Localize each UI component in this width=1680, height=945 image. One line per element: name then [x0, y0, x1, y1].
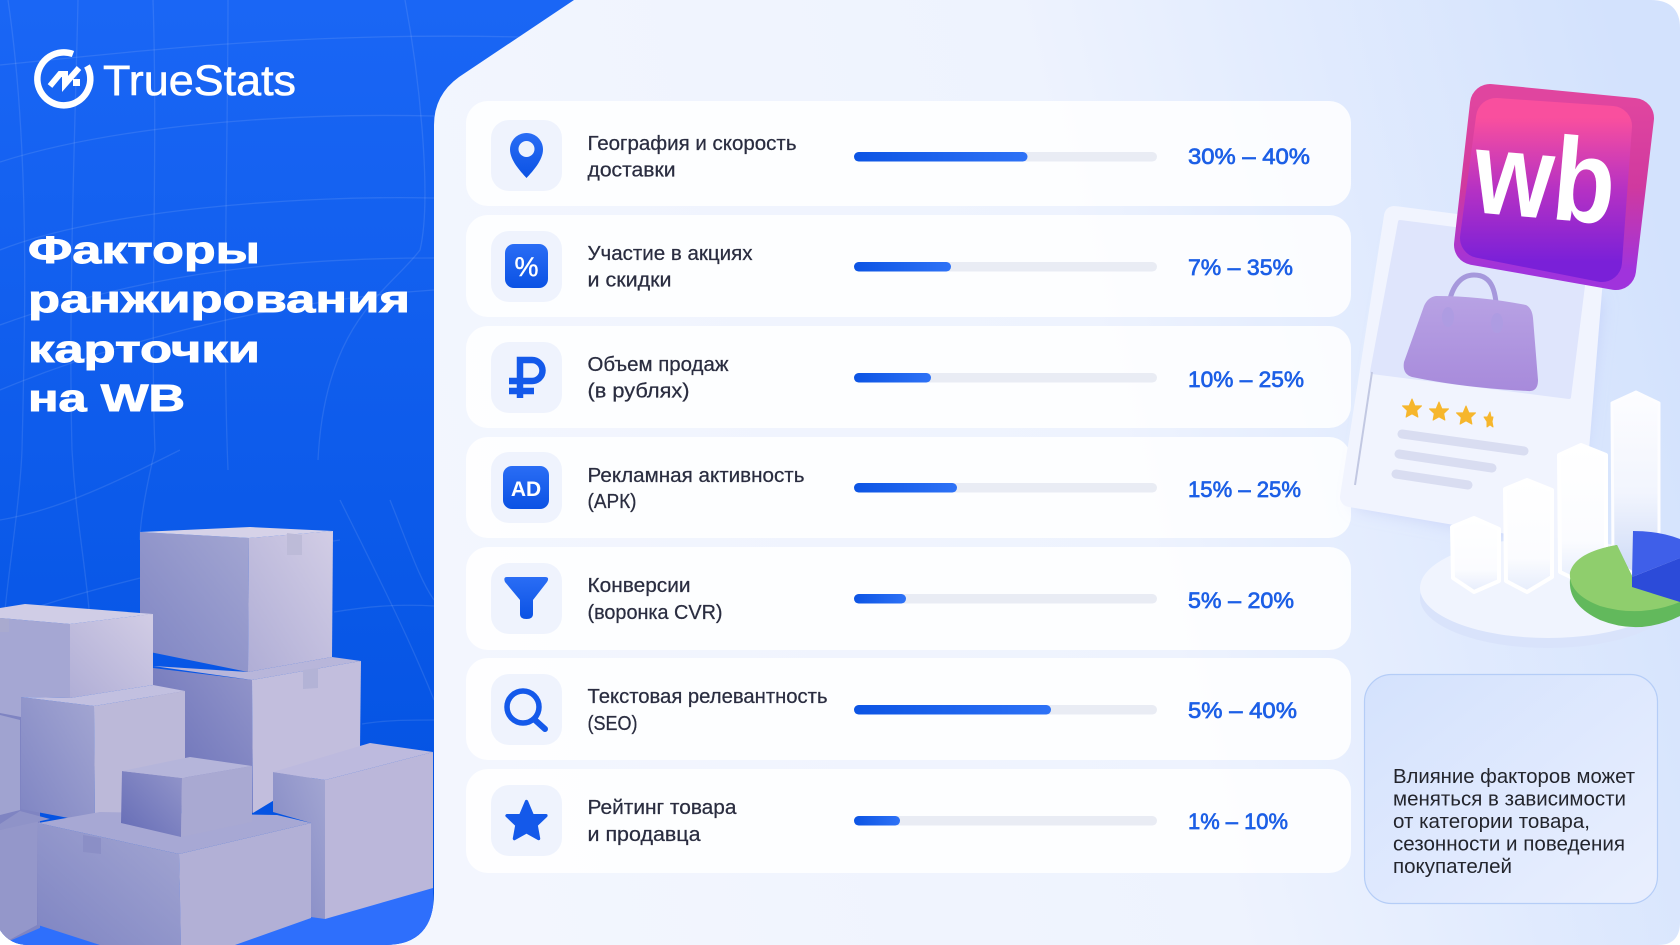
text placeholder lines — [1396, 434, 1524, 485]
row 4: реклама — [466, 437, 1351, 538]
title: на WB — [28, 378, 185, 420]
row 5: конверсии: (воронка CVR) — [588, 601, 722, 624]
row 6: релевантность: (SEO) — [588, 712, 638, 735]
box middle left — [21, 685, 185, 823]
row 1: география: География и скорость — [588, 132, 796, 155]
title: Факторы — [28, 230, 260, 272]
platform — [1420, 538, 1676, 648]
note callout: сезонности и поведения — [1393, 832, 1625, 856]
row 7: рейтинг: 1% – 10% — [1188, 809, 1288, 834]
box right front — [273, 743, 433, 919]
box small center — [121, 757, 252, 837]
row 3: объем продаж — [466, 326, 1351, 428]
icon: percent — [505, 244, 548, 288]
icon: AD — [503, 466, 549, 509]
box top tall — [140, 527, 333, 672]
icon: star — [507, 802, 546, 839]
logo: TrueStats — [37, 52, 296, 105]
logo mark — [37, 52, 90, 105]
box left edge — [0, 715, 20, 815]
note callout: меняться в зависимости — [1393, 788, 1626, 810]
note callout — [1364, 674, 1658, 904]
icon: location pin — [510, 133, 543, 178]
box shadow underlay — [0, 700, 40, 945]
icon: AD: AD — [511, 478, 541, 501]
box bottom big — [38, 812, 311, 945]
row 2: акции: Участие в акциях — [588, 242, 753, 265]
icon: ruble — [509, 360, 542, 398]
row 3: объем продаж: 10% – 25% — [1188, 367, 1304, 392]
pie chart — [1570, 531, 1680, 627]
row 7: рейтинг: и продавца — [588, 823, 701, 846]
blue left panel — [0, 0, 574, 945]
3d bars — [1452, 392, 1659, 592]
row 6: релевантность — [466, 658, 1351, 760]
row 2: акции — [466, 215, 1351, 317]
light background panel — [380, 0, 1680, 945]
icon: percent: % — [514, 252, 538, 282]
title — [28, 230, 410, 420]
illustration: stack of boxes — [0, 527, 433, 945]
box top left — [0, 604, 153, 717]
note callout: от категории товара, — [1393, 810, 1590, 833]
box middle right — [153, 657, 361, 813]
row 6: релевантность: Текстовая релевантность — [588, 685, 828, 708]
factor rows — [466, 101, 1351, 873]
row 7: рейтинг — [466, 769, 1351, 873]
row 7: рейтинг: Рейтинг товара — [588, 796, 737, 819]
logo wordmark: TrueStats — [103, 57, 296, 105]
row 2: акции: и скидки — [588, 268, 672, 292]
note callout: покупателей — [1393, 855, 1512, 878]
stars — [1402, 399, 1493, 427]
row 1: география: 30% – 40% — [1188, 144, 1310, 169]
product card — [1350, 216, 1596, 535]
row 4: реклама: (АРК) — [588, 490, 636, 513]
row 3: объем продаж: Объем продаж — [588, 353, 729, 376]
title: ранжирования — [28, 279, 410, 321]
box bottom left — [0, 811, 50, 945]
row 5: конверсии — [466, 547, 1351, 650]
note callout: Влияние факторов может — [1393, 765, 1636, 788]
icon: magnifier — [507, 691, 545, 729]
title: карточки — [28, 329, 260, 371]
row 4: реклама: 15% – 25% — [1188, 477, 1301, 502]
row 1: география: доставки — [588, 158, 676, 182]
row 2: акции: 7% – 35% — [1188, 255, 1293, 280]
row 4: реклама: Рекламная активность — [588, 464, 804, 487]
illustration: product card with wb logo and charts — [1350, 104, 1680, 648]
row 5: конверсии: Конверсии — [588, 574, 690, 597]
row 5: конверсии: 5% – 20% — [1188, 588, 1294, 613]
row 6: релевантность: 5% – 40% — [1188, 698, 1297, 723]
bag — [1404, 275, 1538, 391]
row 1: география — [466, 101, 1351, 206]
icon: funnel — [504, 577, 548, 619]
wb logo: wb — [1468, 106, 1621, 250]
row 3: объем продаж: (в рублях) — [588, 380, 690, 402]
card shadow — [1355, 230, 1600, 545]
